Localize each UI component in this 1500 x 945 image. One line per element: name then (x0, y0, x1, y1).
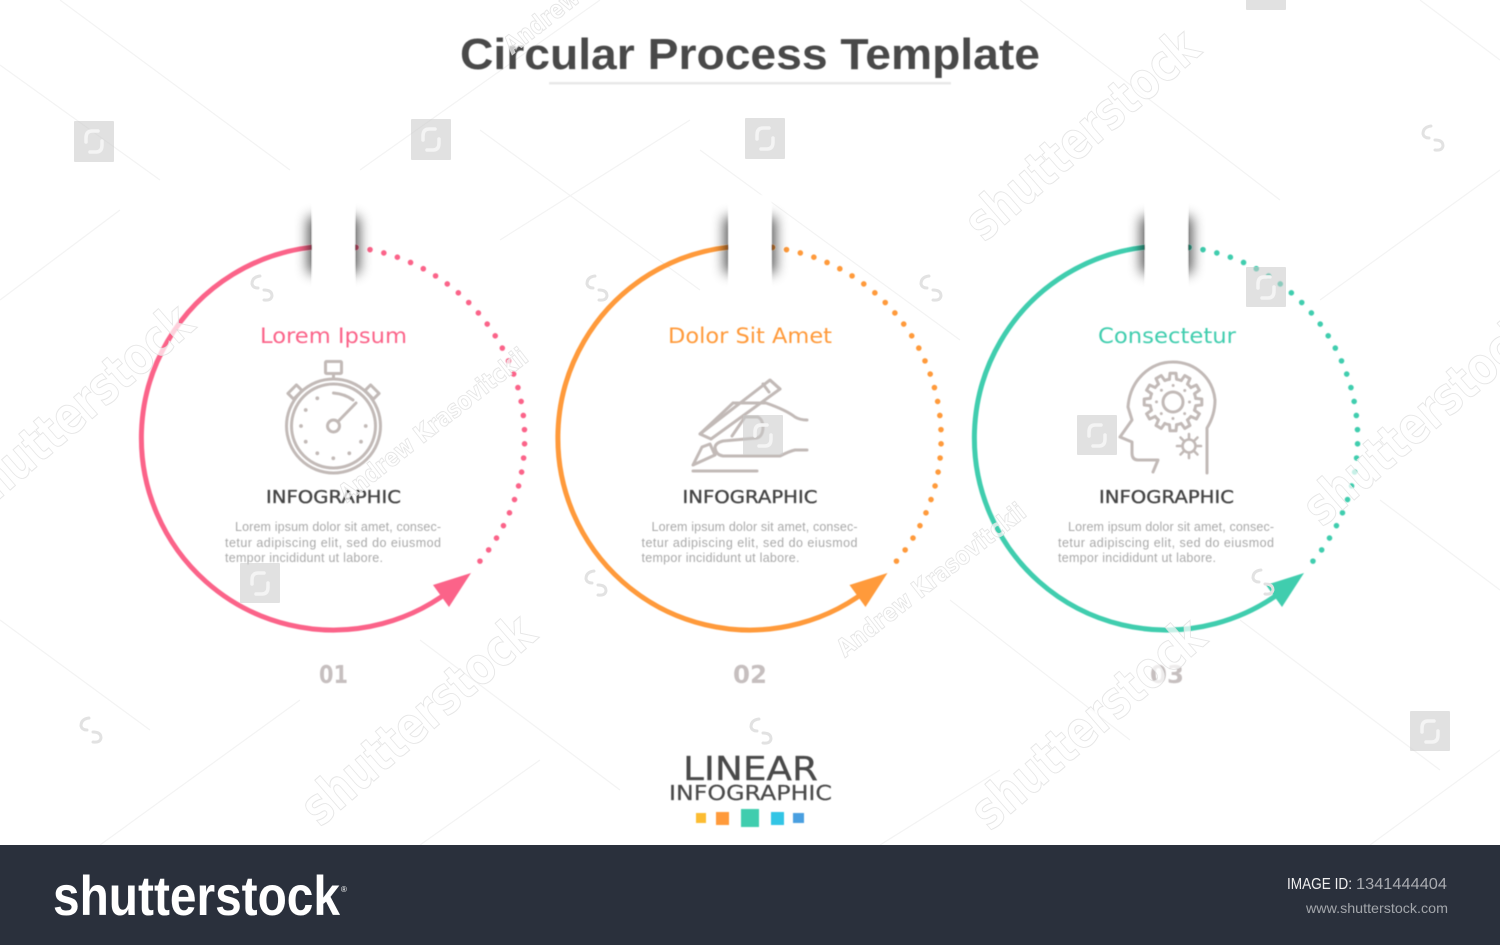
heading: Lorem Ipsum (260, 324, 407, 348)
solid arc with arrow (558, 247, 888, 630)
description: tempor incididunt ut labore. (1058, 551, 1216, 565)
site url: www.shutterstock.com (1305, 900, 1448, 916)
solid arc with arrow (141, 247, 471, 630)
footer logo: shutterstock (53, 864, 341, 927)
description (642, 520, 858, 565)
label: INFOGRAPHIC (1099, 487, 1234, 508)
image id: IMAGE ID: (1287, 876, 1352, 893)
watermark overlay: shutterstock (289, 602, 548, 838)
label: INFOGRAPHIC (266, 487, 401, 508)
dotted arc (772, 247, 941, 569)
watermark overlay: Andrew Krasovitckii (831, 497, 1032, 663)
description: Lorem ipsum dolor sit amet, consec- (235, 520, 441, 534)
description: tetur adipiscing elit, sed do eiusmod (642, 536, 858, 550)
watermark overlay: shutterstock (959, 606, 1218, 842)
description: tempor incididunt ut labore. (642, 551, 800, 565)
description: Lorem ipsum dolor sit amet, consec- (652, 520, 858, 534)
panel: step 02 (558, 195, 941, 689)
number: 02 (733, 660, 767, 689)
panel: step 03 (974, 195, 1358, 689)
brand logo: INFOGRAPHIC (669, 781, 832, 805)
solid arc with arrow (974, 247, 1304, 630)
icon: hand writing with pen (693, 380, 807, 471)
description: tetur adipiscing elit, sed do eiusmod (225, 536, 441, 550)
number: 03 (1150, 660, 1184, 689)
icon: head with gears (1120, 362, 1215, 473)
description (1058, 520, 1274, 565)
watermark overlay: Andrew Krasovitckii (333, 342, 534, 508)
title: Circular Process Template (460, 30, 1040, 79)
footer bar (0, 845, 1500, 945)
description: Lorem ipsum dolor sit amet, consec- (1068, 520, 1274, 534)
panel: step 01 (141, 195, 525, 689)
registered mark: ® (341, 885, 347, 894)
image id number: 1341444404 (1356, 876, 1447, 893)
number: 01 (319, 660, 348, 689)
icon: stopwatch (286, 362, 380, 473)
description: tempor incididunt ut labore. (225, 551, 383, 565)
gap tab with shadow (1141, 195, 1192, 295)
dotted arc (356, 247, 525, 569)
label: INFOGRAPHIC (682, 487, 818, 508)
brand logo: LINEAR (683, 749, 818, 788)
brand logo (669, 749, 832, 827)
heading: Consectetur (1098, 324, 1236, 348)
dotted arc (1189, 247, 1358, 569)
heading: Dolor Sit Amet (668, 324, 832, 348)
description (225, 520, 441, 565)
description: tetur adipiscing elit, sed do eiusmod (1058, 536, 1274, 550)
gap tab with shadow (308, 195, 359, 295)
gap tab with shadow (724, 195, 776, 295)
